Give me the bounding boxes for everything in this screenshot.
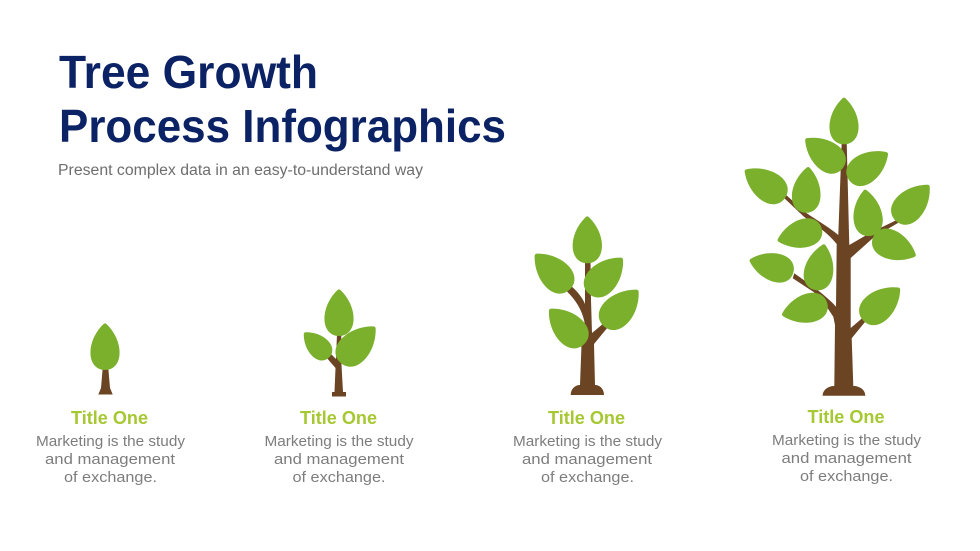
caption: stage 1: and management <box>45 451 176 468</box>
panel: stage 1 <box>36 323 186 486</box>
panel: stage 3 <box>513 216 663 486</box>
caption: stage 4: of exchange. <box>800 468 893 485</box>
caption: stage 4: Title One <box>808 407 884 427</box>
title: Process Infographics <box>59 100 506 152</box>
caption: stage 1: Title One <box>71 408 148 428</box>
tree: young tree <box>524 216 649 395</box>
caption: stage 1: Marketing is the study <box>36 433 186 450</box>
caption: stage 3: of exchange. <box>541 469 634 486</box>
caption: stage 3: Marketing is the study <box>513 433 663 450</box>
caption: stage 3 <box>513 408 663 486</box>
caption: stage 2: Marketing is the study <box>264 433 414 450</box>
caption: stage 4 <box>772 407 922 485</box>
caption: stage 2: of exchange. <box>292 469 386 486</box>
title: Tree Growth <box>59 46 318 98</box>
tree: sapling <box>297 289 386 396</box>
tree: sprout <box>90 323 120 394</box>
caption: stage 3: Title One <box>548 408 625 428</box>
tree: mature tree <box>736 98 940 396</box>
panel: stage 4 <box>736 98 940 485</box>
caption: stage 3: and management <box>522 451 653 468</box>
subtitle: Present complex data in an easy-to-understand way <box>58 162 423 179</box>
caption: stage 1: of exchange. <box>64 469 157 486</box>
caption: stage 1 <box>36 408 186 486</box>
title <box>59 46 506 152</box>
caption: stage 2: Title One <box>300 408 377 428</box>
caption: stage 2: and management <box>274 451 405 468</box>
panel: stage 2 <box>264 289 414 486</box>
caption: stage 4: and management <box>782 450 912 467</box>
caption: stage 2 <box>264 408 414 486</box>
caption: stage 4: Marketing is the study <box>772 432 922 449</box>
